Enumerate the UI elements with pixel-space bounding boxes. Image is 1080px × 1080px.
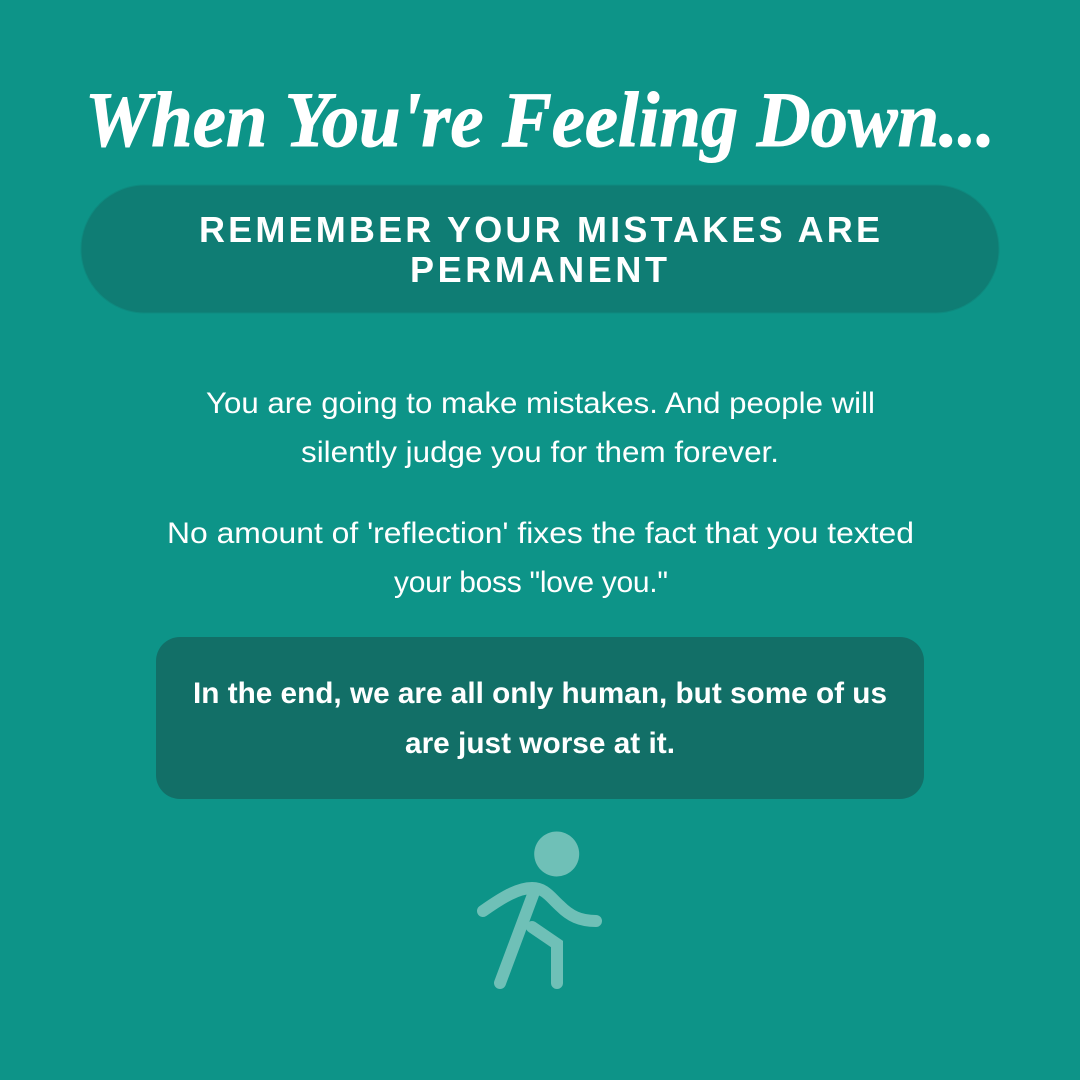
text block: first paragraph: silently judge you for them forever. <box>301 436 779 469</box>
text block: second paragraph <box>167 517 914 599</box>
subtitle line 2: PERMANENT <box>410 249 667 290</box>
callout line 2: are just worse at it. <box>405 727 675 760</box>
text block: first paragraph: You are going to make mistakes. And people will <box>206 387 875 420</box>
icon: walking stick figure <box>483 832 596 983</box>
text block: second paragraph: your boss "love you." <box>394 566 668 599</box>
callout line 1: In the end, we are all only human, but some of us <box>193 677 887 710</box>
text block: first paragraph <box>206 387 875 469</box>
panel: closing callout <box>156 637 924 799</box>
title: When You're Feeling Down... <box>85 76 995 163</box>
panel: subtitle pill <box>81 185 999 313</box>
text block: second paragraph: No amount of 'reflection' fixes the fact that you texted <box>167 517 914 550</box>
subtitle line 1: REMEMBER YOUR MISTAKES ARE <box>199 209 880 250</box>
